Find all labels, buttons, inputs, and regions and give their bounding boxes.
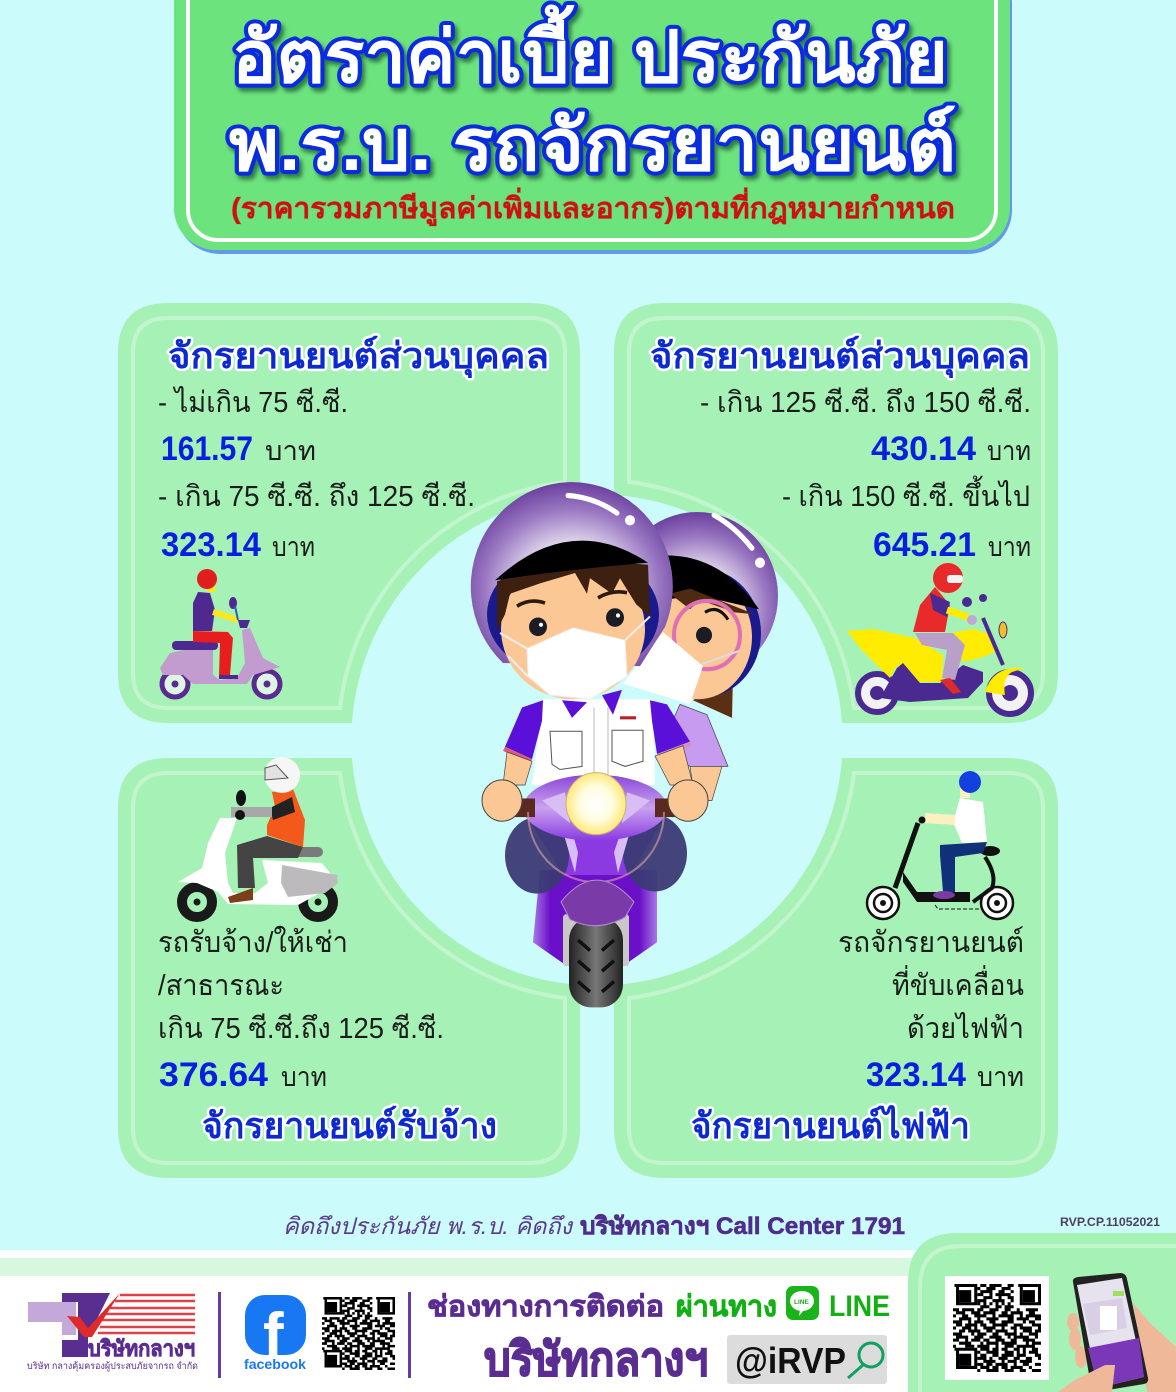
title line 1: อัตราค่าเบี้ย ประกันภัย <box>232 4 948 98</box>
document code: RVP.CP.11052021 <box>1060 1217 1161 1229</box>
unit baht: บาท <box>281 1062 327 1092</box>
header panel <box>174 0 1012 254</box>
heading: จักรยานยนต์รับจ้าง <box>202 1105 497 1146</box>
price 323.14: 323.14 <box>161 526 261 564</box>
title line 2: พ.ร.บ. รถจักรยานยนต์ <box>229 105 956 186</box>
footer band <box>0 1250 1176 1392</box>
price 645.21: 645.21 <box>873 526 976 564</box>
unit baht: บาท <box>265 436 316 466</box>
divider <box>408 1292 411 1378</box>
unit baht: บาท <box>977 1062 1024 1092</box>
icon: white scooter rider <box>178 757 338 917</box>
girl passenger <box>616 512 778 801</box>
line: 75 to 125cc: เกิน 75 ซี.ซี.ถึง 125 ซี.ซี. <box>158 1013 444 1045</box>
price 161.57: 161.57 <box>161 430 253 468</box>
man rider <box>471 482 693 785</box>
line: over 150cc: - เกิน 150 ซี.ซี. ขึ้นไป <box>782 475 1030 513</box>
heading: จักรยานยนต์ส่วนบุคคล <box>650 335 1030 379</box>
unit baht: บาท <box>988 532 1031 562</box>
icon: facebook: f <box>263 1301 284 1370</box>
heading: จักรยานยนต์ไฟฟ้า <box>691 1104 970 1146</box>
heading: จักรยานยนต์ส่วนบุคคล <box>168 335 549 379</box>
panel: electric motorcycle <box>614 758 1058 1178</box>
panel: private motorcycle over 125cc <box>614 303 1058 723</box>
tagline: คิดถึงประกันภัย พ.ร.บ. คิดถึง <box>283 1213 574 1239</box>
icon: scooter rider <box>160 569 280 697</box>
tagline <box>283 1213 905 1240</box>
LINE label: LINE <box>829 1290 890 1323</box>
facebook label: facebook <box>244 1356 306 1372</box>
company and call center: บริษัทกลางฯ Call Center 1791 <box>580 1213 905 1240</box>
line: up to 75cc: - ไม่เกิน 75 ซี.ซี. <box>158 385 348 419</box>
divider <box>218 1292 221 1378</box>
subtitle: (ราคารวมภาษีมูลค่าเพิ่มและอากร)ตามที่กฎหมายกำหนด <box>231 187 955 226</box>
QR code <box>945 1276 1049 1380</box>
icon: big bike rider <box>847 563 1031 714</box>
icon: facebook <box>244 1295 306 1372</box>
icon: LINE <box>786 1286 819 1320</box>
motorcycle <box>482 773 708 1007</box>
line: 75 to 125cc: - เกิน 75 ซี.ซี. ถึง 125 ซี.ซี. <box>158 481 475 513</box>
via label: ผ่านทาง <box>676 1291 777 1323</box>
line: motorcycle: รถจักรยานยนต์ <box>838 926 1024 959</box>
line: 125 to 150cc: - เกิน 125 ซี.ซี. ถึง 150 ซี.ซี. <box>700 387 1031 419</box>
price 430.14: 430.14 <box>871 430 976 468</box>
LINE ID search box <box>727 1335 887 1384</box>
unit baht: บาท <box>272 532 315 562</box>
contact heading: ช่องทางการติดต่อ <box>427 1291 664 1323</box>
logo: RVP <box>27 1293 198 1372</box>
company name: บริษัทกลางฯ <box>88 1336 195 1361</box>
panel: QR and phone <box>908 1233 1176 1392</box>
price 323.14: 323.14 <box>866 1056 966 1094</box>
line: hire / rental: รถรับจ้าง/ให้เช่า <box>158 925 348 959</box>
price 376.64: 376.64 <box>159 1056 268 1094</box>
illustration: two masked riders on purple motorcycle <box>471 482 778 1007</box>
company name large: บริษัทกลางฯ <box>484 1333 708 1385</box>
line: powered: ที่ขับเคลื่อน <box>892 965 1024 1002</box>
company full name: บริษัท กลางคุ้มครองผู้ประสบภัยจากรถ จำกัด <box>27 1361 198 1372</box>
icon: magnifier <box>848 1343 883 1378</box>
LINE ID search box: @iRVP <box>735 1340 846 1381</box>
unit baht: บาท <box>987 436 1031 466</box>
icon: electric scooter rider <box>867 771 1013 919</box>
icon: LINE: LINE <box>794 1299 809 1306</box>
panel: private motorcycle up to 125cc <box>118 303 580 723</box>
panel: public hire motorcycle <box>118 757 580 1178</box>
line: by electricity: ด้วยไฟฟ้า <box>907 1011 1024 1045</box>
facebook QR code <box>322 1298 395 1369</box>
line: public: /สาธารณะ <box>158 970 284 1002</box>
icon: phone in hand <box>1058 1273 1176 1392</box>
